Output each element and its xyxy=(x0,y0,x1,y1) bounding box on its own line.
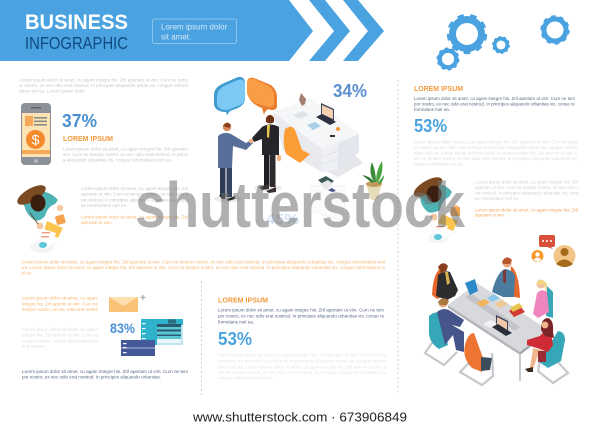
wide orange text xyxy=(22,260,385,276)
orange text: person right: aperiam ut vim. xyxy=(475,212,505,218)
illustration: handshake at office desk xyxy=(214,77,384,220)
orange text: person right xyxy=(475,208,578,218)
orange text: person right: Lorem ipsum dolor sit amet, cu agam integre his. Zril xyxy=(475,208,578,212)
icon: envelope xyxy=(109,293,146,312)
heading: lorem ipsum phone: LOREM IPSUM xyxy=(63,134,113,143)
text: middle dark: formidans mel ea. xyxy=(218,320,254,324)
phone text: Lorem ipsum dolor sit amet, cu agam integre his. Zril aperiam xyxy=(63,146,188,152)
text: right light: Lorem ipsum dolor sit amet, cu agam integre his. Zril aperiam ut vim. Cum ne temp xyxy=(414,140,578,144)
text: right light: or nostro, ex nec odio erat nostrud. In principes aliquando urbas vix, congue reformi xyxy=(414,145,578,150)
text: middle light: congue reformidans mel ea. xyxy=(218,376,274,380)
text: middle dark xyxy=(218,308,384,324)
stat: 45% faded: 45% xyxy=(266,211,299,228)
header label box: Lorem ipsum dolor xyxy=(161,22,228,32)
watermark: shutterstock xyxy=(135,169,465,241)
text: person left: aperiam ut vim. Cum ne tempor nostro, ex nec odio e xyxy=(81,192,188,196)
text: person left: Lorem ipsum dolor sit amet, cu agam integre his. Zril xyxy=(81,186,188,191)
text: middle light: dans mel ea. Lorem ipsum dolor sit amet, cu agam integre his. Zril aperim ut vim, C xyxy=(218,364,388,370)
icon: chat bubble and avatars xyxy=(532,235,576,267)
title: INFOGRAPHIC xyxy=(25,33,128,53)
text: middle light: or nostro, ex nec odio erat nostrud. In principes aliquando urbas vix, congue reformi xyxy=(218,358,387,364)
text: middle light: um ne tempor nostro, ex nec odio erat nostrud. In principes aliquando urbanitas vix, xyxy=(218,370,387,375)
orange text: person left: aperiam ut vim. xyxy=(81,220,112,225)
text: person right: rat nostrud. In principes aliquando urbanitas vix, cong xyxy=(475,190,579,196)
text: middle dark: Lorem ipsum dolor sit amet, cu agam integre his. Zril aperiam ut vim. Cum ne tem xyxy=(218,308,384,312)
dark text: bottom left xyxy=(22,369,188,380)
stat: 53% middle: 53% xyxy=(218,329,252,349)
phone text: vim. Cum ne tempor nostro, ex nec odio erat nostrud. In princi xyxy=(63,152,188,157)
title: BUSINESS xyxy=(25,11,128,34)
orange text: email xyxy=(22,296,98,312)
footer url: www.shutterstock.com · 673906849 xyxy=(192,410,407,424)
text: right top dark xyxy=(414,96,575,112)
text: middle light: Lorem ipsum dolor sit amet, cu agam integre his. Zril aperiam ut vim. Cum ne temp xyxy=(218,352,387,358)
wide orange text: el ea. xyxy=(22,270,32,276)
orange text: email: Lorem ipsum dolor sit amet, cu agam xyxy=(22,296,98,300)
orange text: email: integre his. Zril aperim ut vim. Cum ne xyxy=(22,302,98,306)
wide orange text: ea. Lorem ipsum dolor sit amet, cu agam integre his. Zril aperiam ut vim. Cum ne tempor nostro, ex nec odio erat nostrud. In principes aliquando urbanitas vix, congue reformidans m xyxy=(22,265,385,270)
header label box xyxy=(152,19,236,44)
grey text: email: in principes. xyxy=(22,344,46,348)
title xyxy=(25,11,128,53)
dark text: bottom left: por nostro, ex nec odio erat nostrud. In principes aliquando urbanitas. xyxy=(22,374,161,380)
dark text: bottom left: Lorem ipsum dolor sit amet, cu agam integre his. Zril aperiam ut vim. Cum ne tem xyxy=(22,369,188,374)
text: person left xyxy=(81,186,188,208)
text: right top dark: Lorem ipsum dolor sit amet, cu agam integre his. Zril aperiam ut vim. Cum ne tem xyxy=(414,96,575,101)
stat: 53% right: 53% xyxy=(414,116,447,136)
text: middle dark: por nostro, ex nec odio erat nostrud. In principes aliquando urbanitas vix, conue re xyxy=(218,314,384,318)
text: person right: Lorem ipsum dolor sit amet, cu agam integre his. Zril xyxy=(475,180,578,184)
orange text: person left: Lorem ipsum dolor sit amet, cu agam integre his. Zril xyxy=(81,214,188,220)
icon: envelope: + xyxy=(140,293,146,304)
text: person right xyxy=(475,180,579,201)
grey text: email xyxy=(22,327,98,348)
intro text: or nostro, ex nec odio erat nostrud. In principes aliquando urbas vix, congue reformi xyxy=(19,83,188,88)
text: right top dark: por nostro, ex nec odio erat nostrud. In principes aliquando urbanitas vix, conue re xyxy=(414,102,575,106)
text: person right: ue reformidans mel ea. xyxy=(475,196,519,201)
icon: data cards xyxy=(121,319,183,356)
phone text: a aliquando urbanitas vix, congue reformidans mel ea. xyxy=(63,158,172,162)
text: right light xyxy=(414,140,579,166)
illustration: person at desk right xyxy=(411,173,460,243)
intro text: Lorem ipsum dolor sit amet, cu agam integre his. Zril aperiam ut vim. Cum ne temp xyxy=(19,78,188,82)
phone text xyxy=(63,146,188,162)
header banner xyxy=(0,0,384,61)
orange text: person left xyxy=(81,214,188,225)
heading: right top: LOREM IPSUM xyxy=(414,84,463,93)
illustration: person at desk left xyxy=(14,181,66,253)
text: right light: congue reformidans mel ea. xyxy=(414,162,463,166)
grey text: email: integre his. Zril aperim ut vim. Cum ne xyxy=(22,332,98,338)
text: right light: um ne tempor nostro, ex nec odio erat nostrud. In principes aliquando urbanitas vix, xyxy=(414,156,578,161)
text: person right: aperiam ut vim. Cum ne tempor nostro, ex nec odio e xyxy=(475,185,579,190)
intro text: dans mel ea. Lorem ipsum dolor. xyxy=(19,88,86,94)
header label box: sit amet. xyxy=(161,32,191,42)
stat: 37%: 37% xyxy=(62,111,97,131)
orange text: email: tempor nostro, ex nec odio erat nostrd xyxy=(22,307,98,312)
text: right light: dans mel ea. Lorem ipsum dolor sit amet, cu agam integre his. Zril aperim ut vim. C xyxy=(414,150,579,156)
icon: gears xyxy=(438,16,568,69)
heading: middle bottom: LOREM IPSUM xyxy=(218,296,268,304)
stat: 34%: 34% xyxy=(333,81,367,101)
grey text: email: Lorem ipsum dolor sit amet, cu agam xyxy=(22,327,98,332)
stat: 83%: 83% xyxy=(110,320,135,336)
icon: smartphone with dollar: $ xyxy=(32,132,40,148)
grey text: email: tempor nostro, ex nec odio eratostrud xyxy=(22,338,98,344)
text: person left: ue reformidans mel ea. xyxy=(81,203,127,208)
icon: smartphone with dollar xyxy=(21,103,51,165)
text: person left: rat nostrud. In principes aliquando urbanitas vix, cong xyxy=(81,198,188,202)
text: right top dark: formidans mel ea. xyxy=(414,107,450,112)
intro text xyxy=(19,78,188,94)
text: middle light xyxy=(218,352,388,380)
illustration: meeting table xyxy=(425,257,568,385)
wide orange text: Lorem ipsum dolor sit amet, cu agam integre his. Zril aperiam ut vim. Cum ne tempor nostro, ex nec odio erat nostrud. In principes aliquando urbanitas vix, congue reformidans mel xyxy=(22,260,385,264)
